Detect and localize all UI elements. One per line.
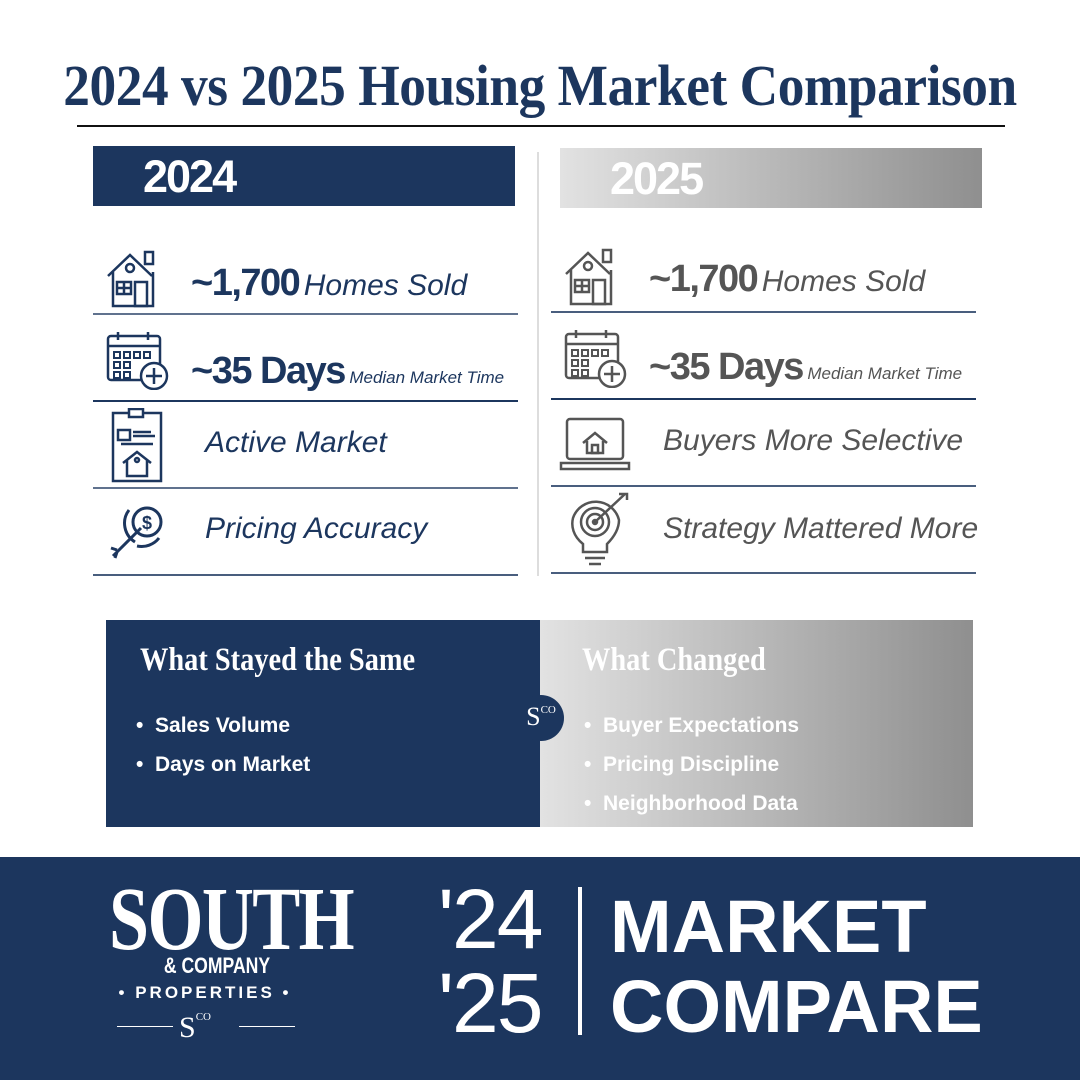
heading: What Stayed the Same: [140, 642, 415, 678]
text: market compare: COMPARE: [610, 965, 983, 1048]
panel: 2025 stats: [551, 248, 978, 574]
stat: days: ~35 Days Median Market Time: [649, 346, 962, 388]
icon: laptop house: [560, 418, 630, 470]
icon: SCo badge: SCO: [526, 702, 556, 731]
logo: South & Company Properties: SCO: [179, 1011, 211, 1044]
panel: 2024 stats: [93, 250, 518, 576]
logo: South & Company Properties: [109, 870, 354, 1044]
icon: calendar: [564, 330, 626, 388]
panel: summary: [106, 620, 973, 827]
header: 2025: [560, 148, 982, 208]
panel: what changed: [540, 620, 973, 827]
bullets: • Sales Volume: [136, 714, 290, 737]
stat: days: ~35 Days Median Market Time: [191, 350, 504, 392]
bullets: • Buyer Expectations: [584, 714, 799, 737]
header: 2024: 2024: [143, 151, 235, 202]
text: market compare: [610, 885, 983, 1048]
bullets: • Neighborhood Data: [584, 792, 798, 815]
icon: pricing target: [110, 506, 162, 558]
text: market compare: MARKET: [610, 885, 927, 968]
text: '24 '25: [438, 872, 541, 1050]
header: 2024: [93, 146, 515, 206]
icon: pricing target: $: [142, 513, 152, 533]
logo: South & Company Properties: • PROPERTIES •: [119, 983, 291, 1002]
bullets: [136, 714, 310, 776]
text: buyers more selective: Buyers More Selective: [663, 424, 963, 457]
icon: house: [565, 248, 612, 306]
icon: lightbulb target: [571, 492, 628, 566]
logo: South & Company Properties: SOUTH: [109, 870, 353, 969]
logo: South & Company Properties: & COMPANY: [164, 953, 270, 978]
text: '24 '25: '24: [438, 872, 541, 966]
text: '24 '25: '25: [438, 956, 541, 1050]
bullets: • Days on Market: [136, 753, 310, 776]
icon: SCo badge: [518, 695, 564, 741]
icon: clipboard: [112, 408, 162, 482]
title: 2024 vs 2025 Housing Market Comparison: [63, 53, 1017, 118]
text: active market: Active Market: [205, 426, 387, 459]
header: 2025: 2025: [610, 153, 702, 204]
text: pricing accuracy: Pricing Accuracy: [205, 512, 427, 545]
footer: [0, 857, 1080, 1080]
icon: calendar: [106, 332, 168, 390]
heading: What Changed: [582, 642, 766, 678]
icon: house: [107, 250, 154, 308]
bullets: [584, 714, 799, 815]
bullets: • Pricing Discipline: [584, 753, 779, 776]
stat: homes sold: ~1,700 Homes Sold: [649, 258, 925, 300]
text: strategy mattered more: Strategy Mattered More: [663, 512, 978, 545]
stat: homes sold: ~1,700 Homes Sold: [191, 262, 467, 304]
panel: what stayed the same: [106, 620, 540, 827]
